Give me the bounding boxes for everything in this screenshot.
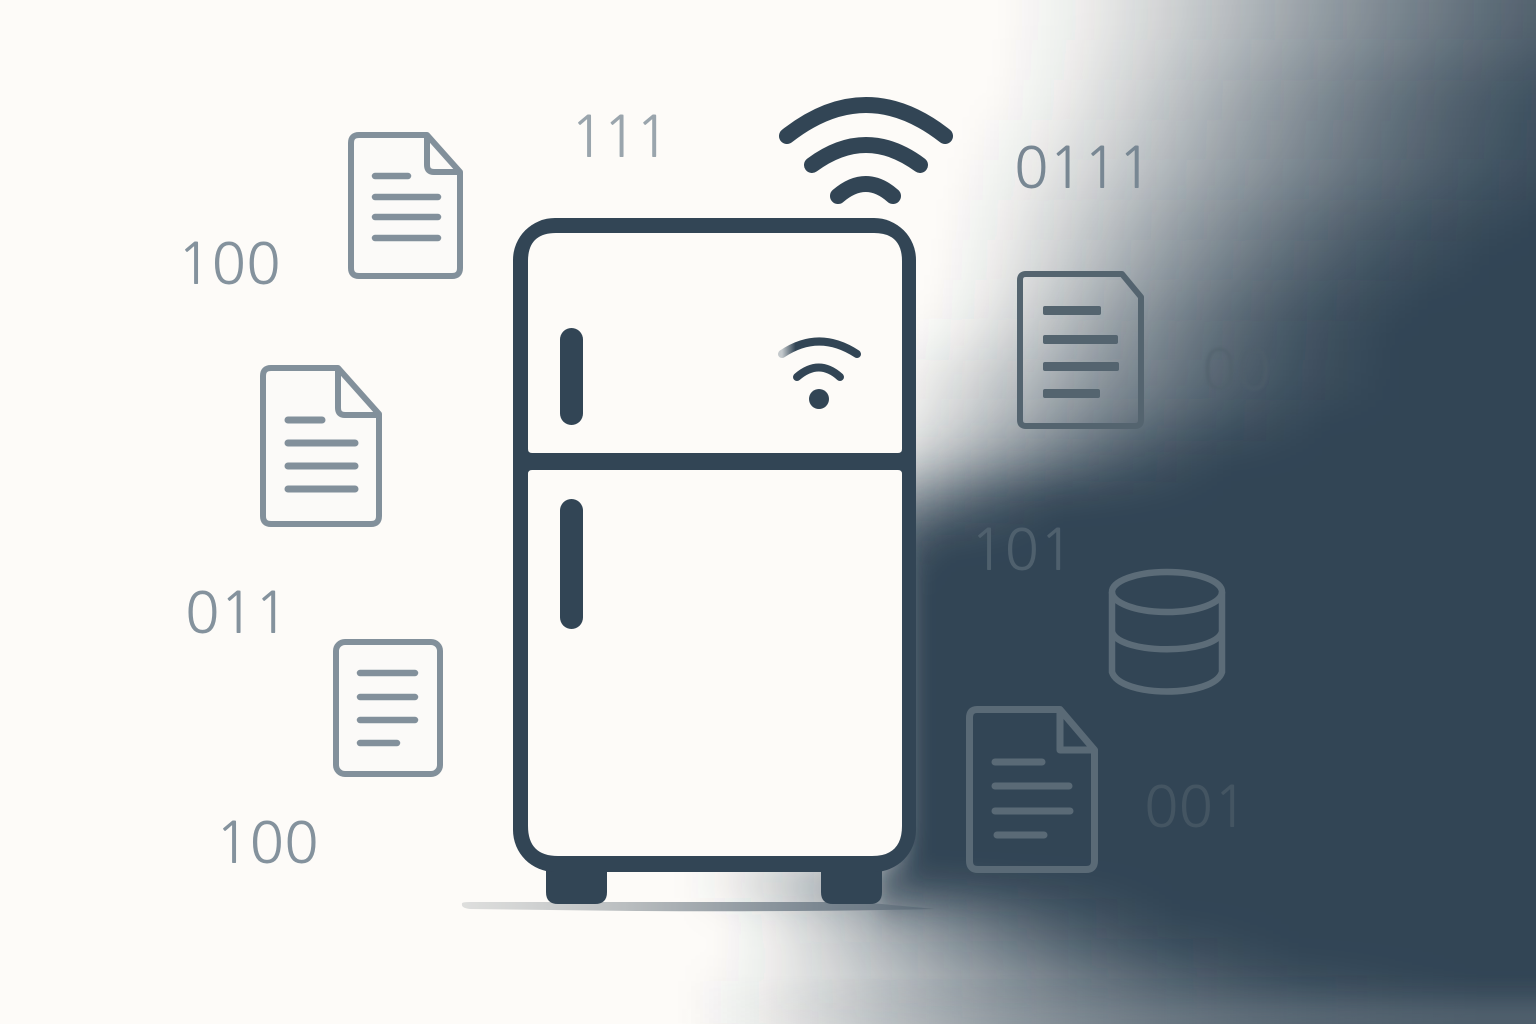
- fridge body: [513, 218, 916, 872]
- icon: document lower right: [970, 710, 1094, 870]
- fridge feet: [546, 860, 882, 904]
- icon: wifi signal above fridge: [787, 105, 945, 196]
- icon: database: [1112, 572, 1222, 692]
- icon: document top left: [351, 135, 460, 276]
- dark gradient area: [680, 0, 1536, 1024]
- binary: 100 lower left: 100: [215, 815, 319, 872]
- binary: 0111 upper right: 0111: [1014, 140, 1152, 197]
- binary: 100 upper left: 100: [177, 236, 281, 293]
- binary: 011 left: 011: [185, 585, 289, 642]
- freezer door: [528, 233, 902, 453]
- icon: document lower left: [336, 642, 440, 774]
- icon: document mid left: [263, 368, 379, 524]
- icon: door wifi: [782, 342, 857, 409]
- floor shadow: [462, 902, 935, 911]
- refrigerator: [513, 218, 916, 904]
- upper door handle: [560, 328, 583, 425]
- binary: 00 right: 00: [1202, 342, 1271, 399]
- icon: document upper right: [1020, 274, 1141, 426]
- binary: 111 top: 111: [570, 109, 668, 166]
- main door: [528, 470, 902, 856]
- binary: 001: 001: [1144, 779, 1248, 836]
- binary: 101: 101: [970, 522, 1074, 579]
- lower door handle: [560, 499, 583, 629]
